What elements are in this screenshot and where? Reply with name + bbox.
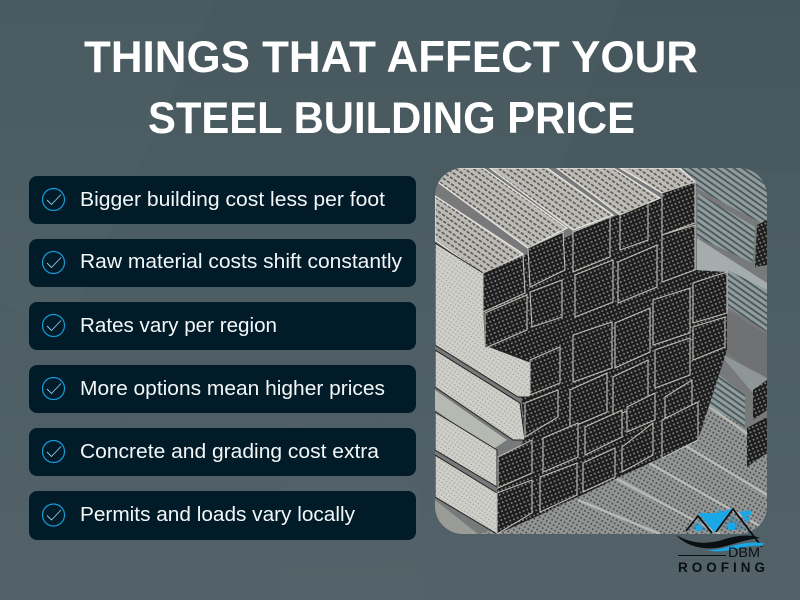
icon: houses and roof [676, 508, 764, 551]
logo: DBM Roofing [676, 508, 765, 575]
tube ends: row 2 [485, 295, 527, 348]
item: rates [29, 302, 416, 350]
top faces [435, 196, 523, 274]
title [84, 33, 698, 143]
logo subtitle: ROOFING [678, 560, 765, 575]
item: concrete [29, 428, 416, 476]
tube ends: row 6 [497, 480, 532, 534]
floor [480, 395, 767, 534]
tube ends: row 3 [530, 347, 560, 395]
item: raw material [29, 239, 416, 287]
tube ends: row 5 [498, 440, 532, 488]
item: permits: Permits and loads vary locally [80, 503, 356, 526]
item: bigger building [29, 176, 416, 224]
item: permits [29, 491, 416, 540]
tube ends: row 4 [525, 390, 558, 437]
list of price factors [29, 176, 416, 540]
photo: stacked steel tubes [435, 168, 767, 534]
title: STEEL BUILDING PRICE [148, 94, 635, 143]
dark stack mass [483, 182, 727, 534]
logo rule [678, 555, 726, 556]
item: rates: Rates vary per region [80, 314, 277, 337]
tube ends: row 1 [483, 255, 525, 312]
item: more options [29, 365, 416, 413]
title: THINGS THAT AFFECT YOUR [84, 33, 698, 82]
item: raw material: Raw material costs shift constantly [80, 250, 403, 273]
pale side faces [435, 243, 530, 397]
item: bigger building: Bigger building cost less per foot [80, 188, 385, 211]
right back tubes [680, 168, 767, 226]
item: more options: More options mean higher prices [80, 377, 385, 400]
logo wordmark: DBM [728, 544, 760, 560]
item: concrete: Concrete and grading cost extra [80, 440, 380, 463]
